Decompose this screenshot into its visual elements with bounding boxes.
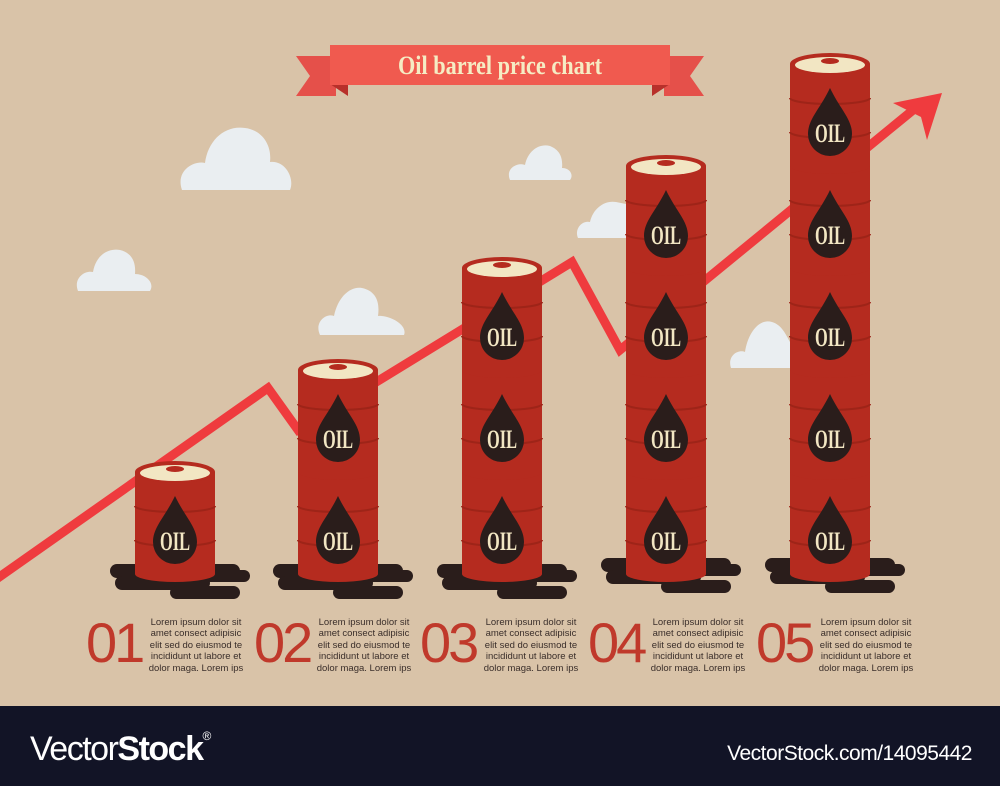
labels 01-05: Lorem ipsum dolor sit	[151, 617, 242, 628]
labels 01-05: elit sed do eiusmod te	[820, 640, 912, 651]
barrel column 3: OIL	[487, 323, 517, 352]
barrel column 2: OIL	[323, 527, 353, 556]
labels 01-05: elit sed do eiusmod te	[318, 640, 410, 651]
labels 01-05: Lorem ipsum dolor sit	[486, 617, 577, 628]
footer: ®	[202, 729, 211, 743]
labels 01-05: Lorem ipsum dolor sit	[821, 617, 912, 628]
puddles	[110, 558, 905, 599]
barrel column 5	[790, 53, 870, 582]
barrel column 3: OIL	[487, 425, 517, 454]
labels 01-05: Lorem ipsum dolor sit	[319, 617, 410, 628]
title banner	[296, 45, 704, 96]
barrel column 2	[298, 359, 378, 582]
labels 01-05: incididunt ut labore et	[821, 651, 912, 662]
barrel column 1: OIL	[160, 527, 190, 556]
barrel column 5: OIL	[815, 527, 845, 556]
labels 01-05: dolor maga. Lorem ips	[317, 663, 412, 674]
labels 01-05: incididunt ut labore et	[151, 651, 242, 662]
arrow: price trend	[0, 93, 942, 580]
labels 01-05: 03	[420, 611, 477, 674]
barrel column 5: OIL	[815, 221, 845, 250]
labels 01-05: elit sed do eiusmod te	[150, 640, 242, 651]
labels 01-05: amet consect adipisic	[486, 628, 577, 639]
barrel column 3: OIL	[487, 527, 517, 556]
footer	[0, 706, 1000, 786]
barrel column 3	[462, 257, 542, 582]
labels 01-05: amet consect adipisic	[319, 628, 410, 639]
labels 01-05: incididunt ut labore et	[486, 651, 577, 662]
labels 01-05	[86, 611, 914, 674]
labels 01-05: amet consect adipisic	[821, 628, 912, 639]
title text: Oil barrel price chart	[398, 51, 602, 80]
labels 01-05: 02	[254, 611, 311, 674]
labels 01-05: dolor maga. Lorem ips	[484, 663, 579, 674]
labels 01-05: amet consect adipisic	[151, 628, 242, 639]
barrel column 1	[135, 461, 215, 582]
barrel column 5: OIL	[815, 323, 845, 352]
barrel column 4	[626, 155, 706, 582]
labels 01-05: dolor maga. Lorem ips	[651, 663, 746, 674]
footer: VectorStock.com/14095442	[727, 742, 972, 765]
labels 01-05: incididunt ut labore et	[653, 651, 744, 662]
clouds	[77, 128, 790, 368]
barrel column 4: OIL	[651, 323, 681, 352]
labels 01-05: 05	[756, 611, 813, 674]
barrel column 2: OIL	[323, 425, 353, 454]
labels 01-05: Lorem ipsum dolor sit	[653, 617, 744, 628]
labels 01-05: amet consect adipisic	[653, 628, 744, 639]
barrel column 5: OIL	[815, 425, 845, 454]
labels 01-05: 01	[86, 611, 143, 674]
barrel column 5: OIL	[815, 119, 845, 148]
labels 01-05: 04	[588, 611, 646, 674]
labels 01-05: elit sed do eiusmod te	[652, 640, 744, 651]
labels 01-05: dolor maga. Lorem ips	[149, 663, 244, 674]
labels 01-05: incididunt ut labore et	[319, 651, 410, 662]
labels 01-05: elit sed do eiusmod te	[485, 640, 577, 651]
labels 01-05: dolor maga. Lorem ips	[819, 663, 914, 674]
footer: VectorStock	[30, 730, 202, 768]
barrel column 4: OIL	[651, 527, 681, 556]
barrel column 4: OIL	[651, 221, 681, 250]
barrel column 4: OIL	[651, 425, 681, 454]
